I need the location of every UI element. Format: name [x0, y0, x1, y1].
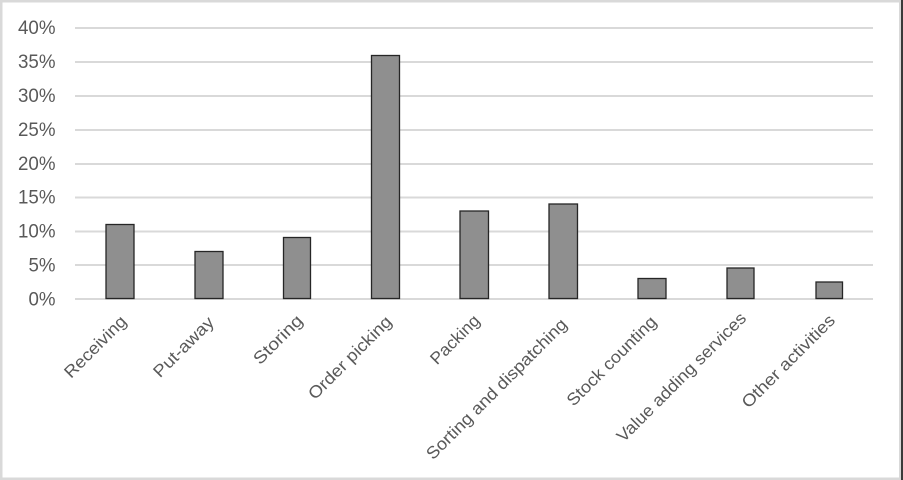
- x-axis category labels: Sorting and dispatching: [422, 315, 571, 463]
- x-axis category labels: Put-away: [149, 312, 218, 381]
- x-axis category labels: Storing: [249, 311, 307, 368]
- y-axis labels: 0%: [28, 290, 56, 310]
- x-axis category labels: [60, 309, 839, 463]
- y-axis labels: 10%: [18, 222, 56, 242]
- y-axis labels: 20%: [18, 154, 56, 175]
- x-axis category labels: Stock counting: [563, 312, 660, 410]
- y-axis labels: 5%: [28, 256, 56, 276]
- y-axis labels: 30%: [18, 86, 56, 107]
- y-axis labels: [18, 18, 56, 310]
- bars: [106, 56, 842, 298]
- y-axis labels: 40%: [18, 18, 56, 39]
- x-axis category labels: Other activities: [738, 311, 839, 412]
- x-axis category labels: Packing: [426, 311, 484, 368]
- y-axis labels: 25%: [18, 120, 56, 141]
- y-axis labels: 35%: [18, 52, 56, 73]
- y-axis labels: 15%: [18, 188, 56, 208]
- x-axis category labels: Order picking: [304, 312, 396, 403]
- x-axis category labels: Receiving: [60, 312, 130, 382]
- x-axis category labels: Value adding services: [613, 309, 750, 446]
